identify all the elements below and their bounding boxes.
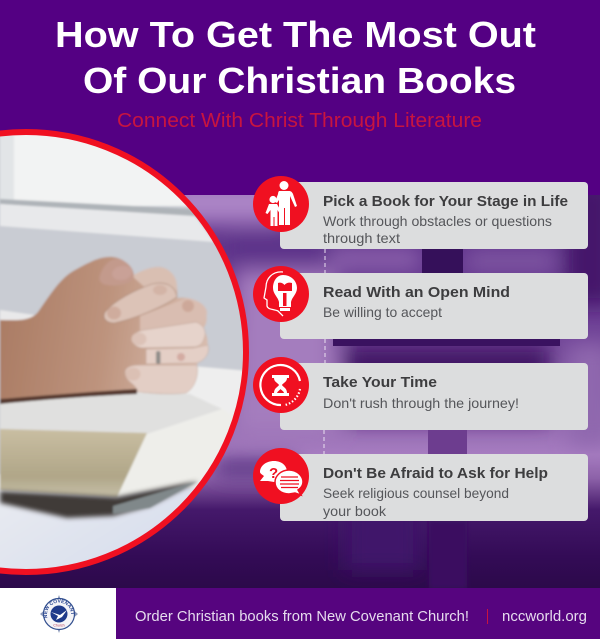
card 2 body: Be willing to accept (323, 304, 442, 320)
footer logo panel (0, 588, 116, 639)
card 4: ask for help (253, 448, 588, 521)
card 2 heading: Read With an Open Mind (323, 284, 510, 301)
finger 3 (132, 322, 205, 348)
logo: New Covenant Church seal: Church (53, 624, 65, 628)
subtitle: Connect With Christ Through Literature (117, 110, 482, 132)
icon: parent and child (253, 176, 309, 232)
finger 5 (125, 365, 198, 394)
icon: hourglass (253, 357, 309, 413)
card 1 heading: Pick a Book for Your Stage in Life (323, 193, 568, 210)
finger 1 (104, 283, 177, 323)
book right page block (119, 488, 149, 496)
footer call to action: Order Christian books from New Covenant Church! (135, 608, 469, 625)
card 1 body (323, 213, 552, 246)
card 1 body: through text (323, 230, 400, 246)
photo: praying hands on open book (0, 120, 260, 590)
title: How To Get The Most Out (55, 14, 536, 55)
timeline dashes (324, 249, 325, 454)
shadow under hands (0, 389, 137, 404)
card 1: pick a book (253, 176, 588, 249)
book fore edge (0, 429, 147, 497)
card 4 body: Seek religious counsel beyond (323, 485, 509, 501)
finger 2 (140, 298, 207, 331)
table surface (0, 366, 242, 489)
book top page (0, 393, 222, 434)
icon: speech bubbles: ? (269, 465, 278, 482)
card 1 body: Work through obstacles or questions (323, 213, 552, 229)
footer bar (0, 588, 587, 639)
finger 4 with ring (146, 345, 209, 364)
card 2: open mind (253, 266, 588, 339)
footer website: nccworld.org (502, 608, 587, 625)
title: Of Our Christian Books (83, 60, 516, 101)
back knuckle (133, 267, 176, 290)
background: blurred cross photo (0, 180, 600, 588)
hand (0, 257, 208, 402)
photo ring (0, 132, 246, 572)
card 4 heading: Don't Be Afraid to Ask for Help (323, 465, 548, 482)
card 3 body: Don't rush through the journey! (323, 395, 519, 411)
card 4 body: your book (323, 503, 387, 519)
footer divider (487, 609, 488, 624)
card 4 body (323, 485, 509, 519)
title (55, 14, 536, 101)
card 3: take your time (253, 357, 588, 430)
icon: speech bubbles (253, 448, 309, 504)
book cover (0, 481, 198, 518)
logo: New Covenant Church seal: NEW COVENANT (44, 599, 74, 618)
icon: head with book bulb (253, 266, 309, 322)
logo: New Covenant Church seal (40, 595, 78, 633)
card 3 heading: Take Your Time (323, 374, 437, 391)
thumb (99, 259, 134, 286)
